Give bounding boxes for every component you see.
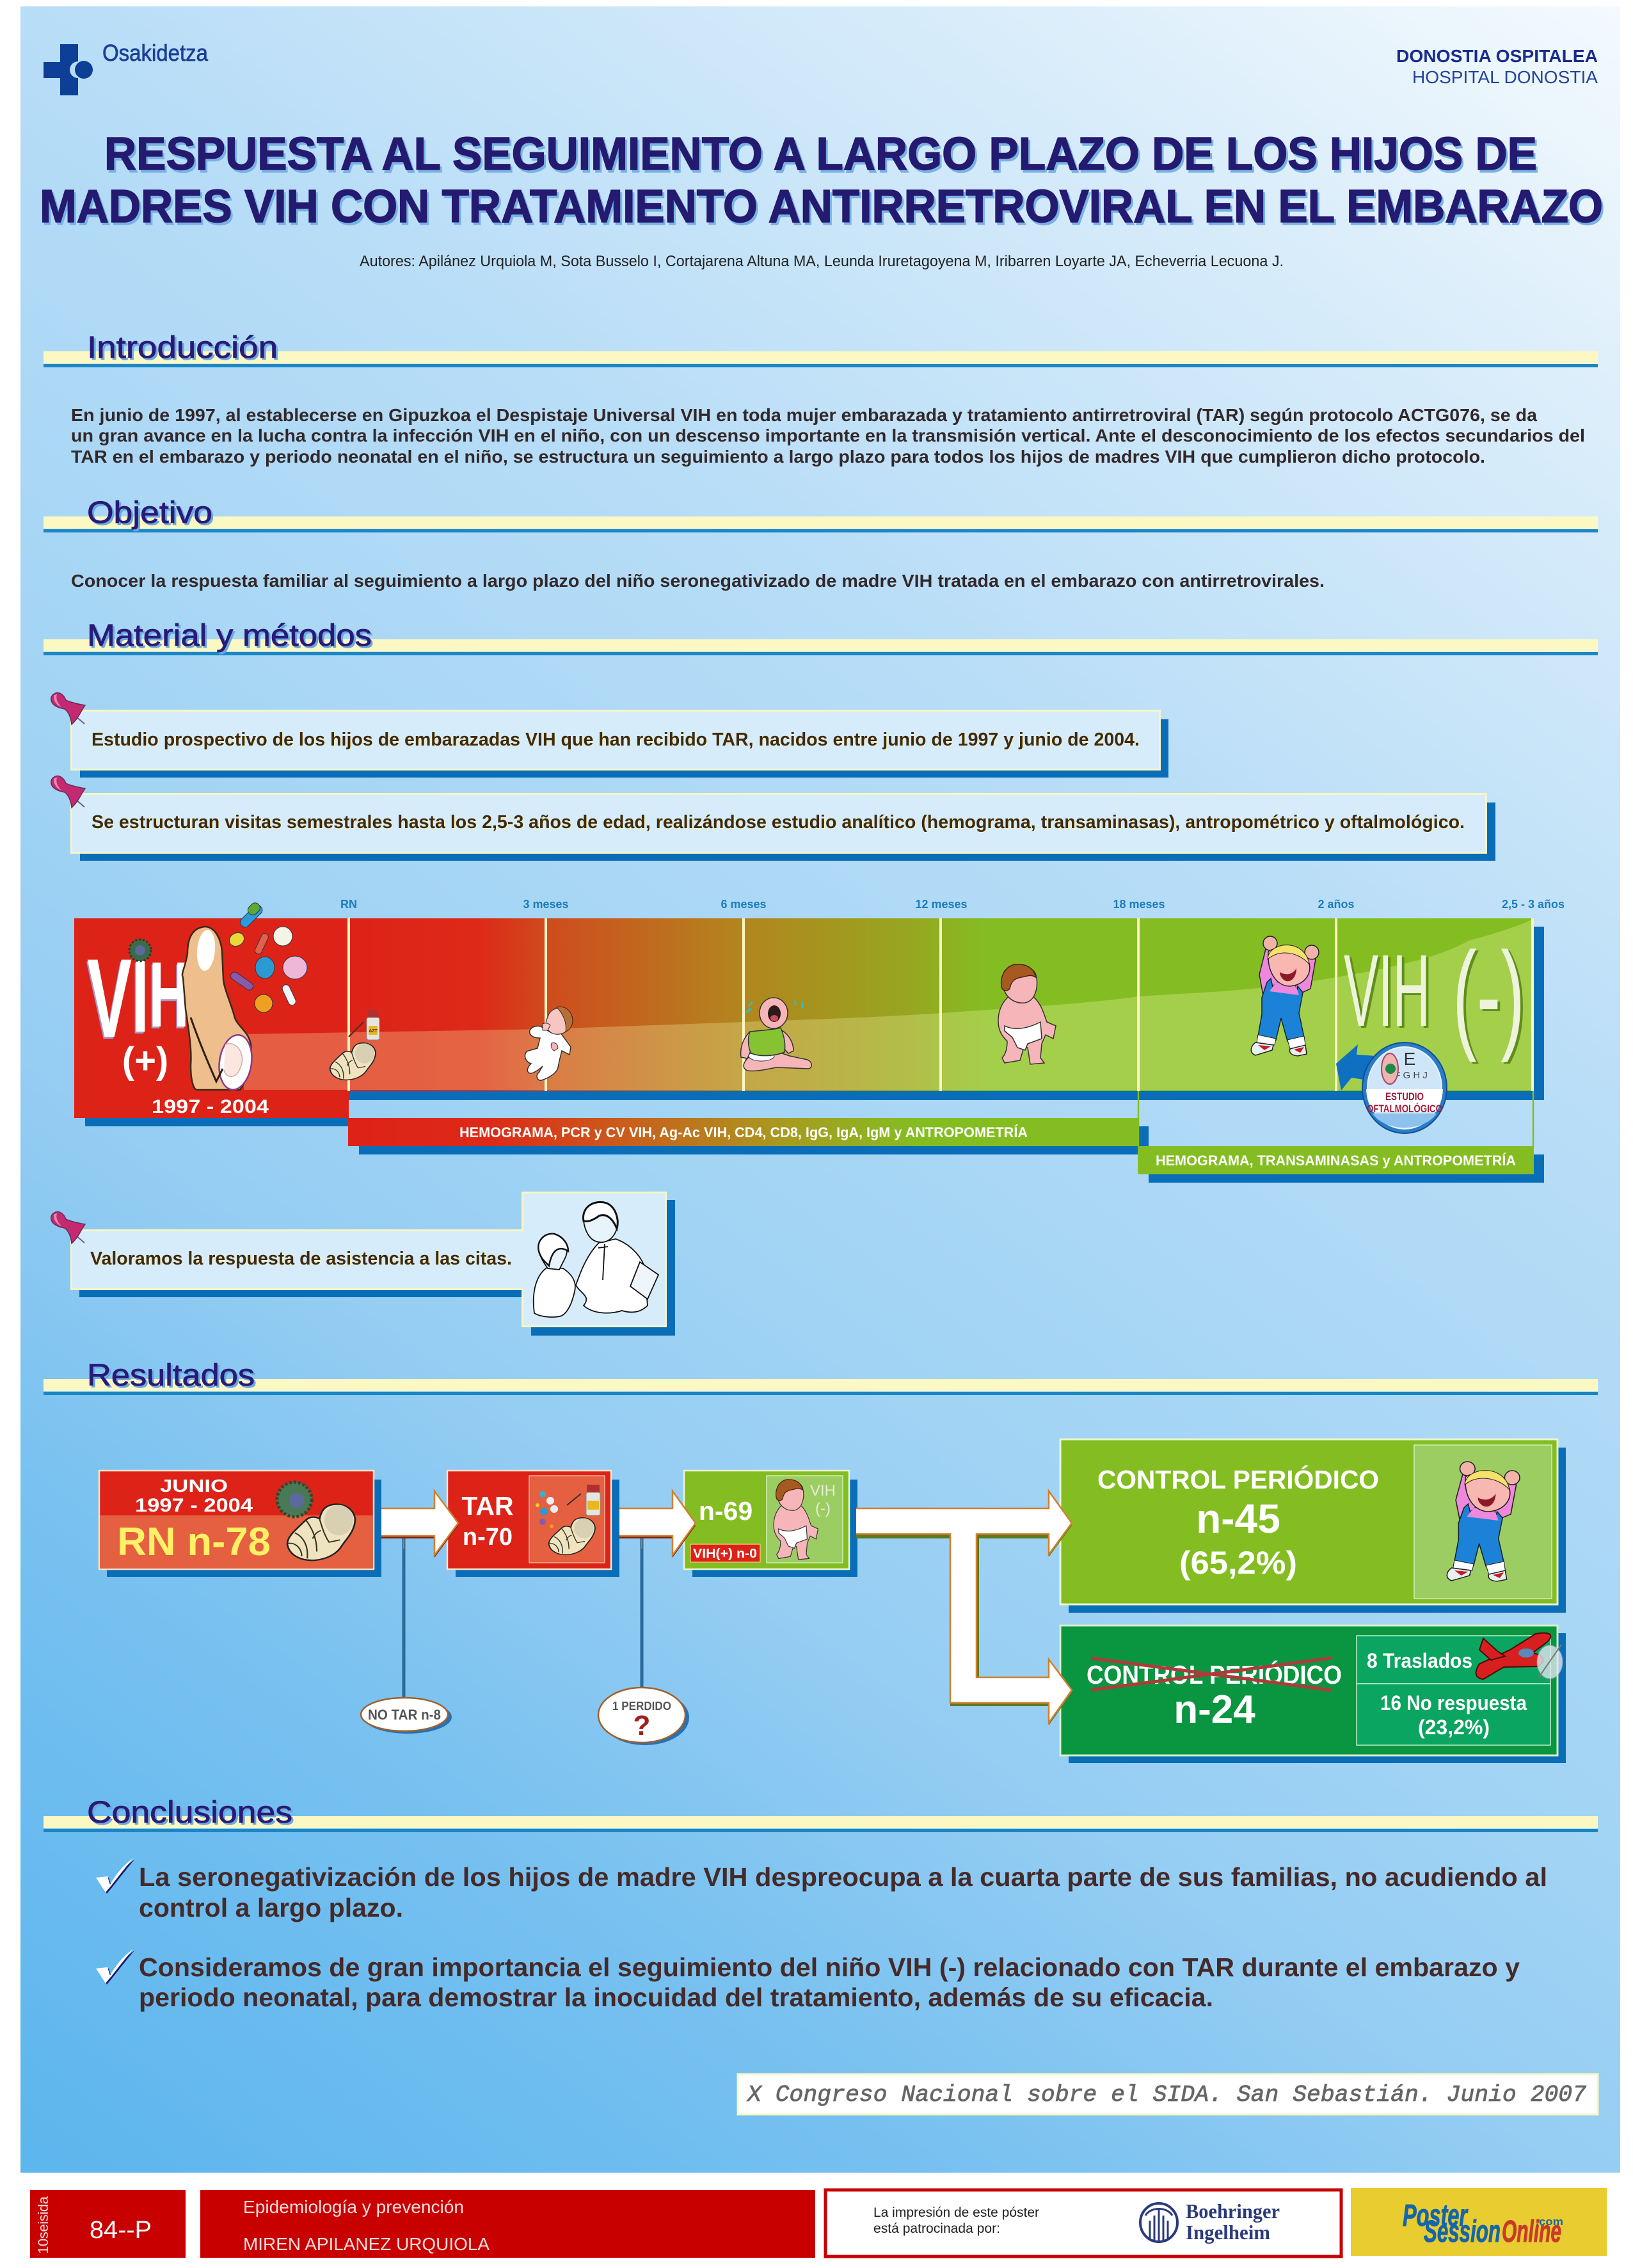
box: RN n-78: RN n-78 bbox=[117, 1520, 271, 1564]
bubble: NO TAR: NO TAR n-8 bbox=[368, 1707, 441, 1723]
box: n-69: (-) bbox=[815, 1500, 831, 1517]
VIH positive red block bbox=[74, 918, 349, 1118]
icon: medicine bottle bbox=[349, 1010, 379, 1040]
VIH label: V bbox=[87, 935, 132, 1061]
bubble: NO TAR bbox=[361, 1698, 452, 1734]
conclusion 2 bbox=[96, 1949, 1520, 2012]
box: TAR n-70: n-70 bbox=[463, 1524, 513, 1551]
footer: sponsor: La impresión de este póster bbox=[873, 2205, 1039, 2220]
ophthalmology badge bbox=[1336, 1042, 1447, 1133]
VIH negative label: VIH bbox=[1346, 935, 1433, 1050]
ophthalmology badge: ESTUDIO bbox=[1385, 1090, 1424, 1103]
section: Conclusiones bbox=[44, 1796, 1598, 1832]
timeline month labels: 2,5 - 3 años bbox=[1502, 898, 1565, 911]
footer: poster number: 84--P bbox=[90, 2217, 152, 2244]
VIH label bbox=[87, 935, 189, 1061]
VIH negative label: VIH bbox=[1344, 933, 1430, 1048]
box: control periódico n-24: CONTROL PERIÓDICO bbox=[1087, 1660, 1342, 1689]
timeline month labels: 2 años bbox=[1318, 898, 1355, 911]
box: control periódico n-45: n-45 bbox=[1196, 1496, 1280, 1542]
box: RN n-78: JUNIO bbox=[160, 1476, 228, 1496]
lab test band red to green bbox=[348, 1118, 1138, 1146]
conclusion 2: periodo neonatal, para demostrar la inocuidad del tratamiento, además de su eficacia. bbox=[139, 1983, 1213, 2012]
icon: pills bbox=[227, 901, 307, 1012]
T-shaped arrow bbox=[856, 1491, 1072, 1725]
years: 1997 - 2004 bbox=[152, 1096, 269, 1117]
box: RN n-78 bbox=[99, 1471, 381, 1577]
footer: category and author: Epidemiología y prevención bbox=[243, 2197, 464, 2217]
box: n-69: n-69 bbox=[699, 1496, 753, 1526]
callout: estudio prospectivo: Estudio prospectivo de los hijos de embarazadas VIH que han recibido TAR, nacidos entre junio de 1997 y junio de 2004. bbox=[92, 730, 1140, 750]
icon: baby 3 months bbox=[525, 1007, 573, 1080]
icon: crying baby 6 months bbox=[741, 998, 811, 1071]
plus sign: (+) bbox=[122, 1040, 168, 1082]
box: TAR n-70 bbox=[447, 1471, 619, 1577]
icon: medicine bottle: AZT bbox=[369, 1029, 378, 1034]
introduction text: TAR en el embarazo y periodo neonatal en el niño, se estructura un seguimiento a largo plazo para todos los hijos de madres VIH que cumplieron dicho protocolo. bbox=[71, 447, 1485, 467]
icon: happy toddler bbox=[1251, 936, 1319, 1056]
callout: valoramos asistencia bbox=[72, 1193, 675, 1336]
authors: Autores: Apilánez Urquiola M, Sota Busselo I, Cortajarena Altuna MA, Leunda Iruretagoyena M, Iribarren Loyarte JA, Echeverria Lecuona J. bbox=[360, 253, 1284, 270]
box: control periódico n-24 bbox=[1060, 1625, 1566, 1763]
section: Objetivo: Objetivo bbox=[87, 496, 212, 530]
lab test band green: HEMOGRAMA, TRANSAMINASAS y ANTROPOMETRÍA bbox=[1156, 1153, 1516, 1169]
title: RESPUESTA AL SEGUIMIENTO A LARGO PLAZO DE LOS HIJOS DE bbox=[104, 129, 1537, 180]
callout: valoramos asistencia: Valoramos la respuesta de asistencia a las citas. bbox=[90, 1249, 512, 1269]
timeline month labels: 6 meses bbox=[721, 898, 767, 911]
gradient progress bar bbox=[349, 918, 1534, 1091]
footer: poster number: 10seisida bbox=[35, 2196, 51, 2254]
results flow diagram bbox=[99, 1439, 1566, 1763]
introduction text: En junio de 1997, al establecerse en Gipuzkoa el Despistaje Universal VIH en toda mujer embarazada y tratamiento antirretroviral (TAR) según protocolo ACTG076, se da bbox=[71, 405, 1538, 425]
box: RN n-78: 1997 - 2004 bbox=[135, 1495, 253, 1516]
box: control periódico n-24: (23,2%) bbox=[1418, 1716, 1490, 1739]
ophthalmology badge: F G H J bbox=[1394, 1070, 1428, 1081]
logo: Boehringer Ingelheim: Ingelheim bbox=[1186, 2221, 1270, 2244]
conclusion 1 bbox=[96, 1858, 1547, 1922]
box: control periódico n-24: n-24 bbox=[1174, 1688, 1255, 1732]
icon: pushpin 2 bbox=[51, 776, 85, 808]
introduction text: un gran avance en la lucha contra la infección VIH en el niño, con un descenso importante en la transmisión vertical. Ante el desconocimiento de los efectos secundarios del bbox=[71, 426, 1585, 445]
icon: pushpin 3 bbox=[51, 1211, 85, 1243]
box: control periódico n-45: (65,2%) bbox=[1179, 1545, 1297, 1581]
lab test band green bbox=[1138, 1091, 1534, 1174]
arrow 2 bbox=[619, 1491, 696, 1558]
box: TAR n-70: TAR bbox=[461, 1491, 514, 1521]
objective text: Conocer la respuesta familiar al seguimiento a largo plazo del niño seronegativizado de madre VIH tratada en el embarazo con antirretrovirales. bbox=[71, 571, 1325, 591]
section: Introducción: Introducción bbox=[87, 331, 278, 365]
arrow 1 bbox=[381, 1491, 458, 1558]
conclusion 1: La seronegativización de los hijos de madre VIH despreocupa a la cuarta parte de sus familias, no acudiendo al bbox=[139, 1862, 1547, 1892]
timeline month labels: 3 meses bbox=[523, 898, 569, 911]
footer: poster session online logo bbox=[1351, 2188, 1607, 2256]
connector lines bbox=[404, 1536, 642, 1699]
VIH label: I bbox=[132, 939, 149, 1053]
title: MADRES VIH CON TRATAMIENTO ANTIRRETROVIRAL EN EL EMBARAZO bbox=[40, 181, 1603, 232]
congress banner bbox=[738, 2074, 1598, 2114]
rising light band bbox=[244, 918, 1534, 1090]
timeline blue shadows bbox=[85, 927, 1544, 1183]
VIH negative label: (-) bbox=[1455, 929, 1527, 1065]
section: Material y métodos bbox=[44, 619, 1598, 655]
section: Resultados bbox=[44, 1359, 1598, 1395]
conclusion 2: Consideramos de gran importancia el seguimiento del niño VIH (-) relacionado con TAR durante el embarazo y bbox=[139, 1953, 1520, 1982]
section: Objetivo bbox=[44, 496, 1598, 532]
introduction text bbox=[71, 405, 1585, 467]
section: Introducción bbox=[44, 331, 1598, 367]
timeline chart bbox=[74, 898, 1565, 1183]
footer: sponsor bbox=[825, 2190, 1341, 2256]
footer: poster number bbox=[30, 2190, 186, 2258]
timeline vertical markers bbox=[349, 918, 1533, 1091]
icon: baby 12 months bbox=[998, 964, 1056, 1064]
icon: pregnant woman bbox=[182, 927, 255, 1092]
callout: visitas semestrales: Se estructuran visitas semestrales hasta los 2,5-3 años de edad, realizándose estudio analítico (hemograma, transaminasas), antropométrico y oftalmológico. bbox=[92, 812, 1465, 833]
box: control periódico n-24: 16 No respuesta bbox=[1380, 1691, 1527, 1714]
bubble: 1 perdido: ? bbox=[633, 1710, 650, 1741]
title bbox=[40, 129, 1603, 232]
callout: visitas semestrales bbox=[72, 794, 1495, 861]
timeline month labels: RN bbox=[340, 898, 357, 911]
box: control periódico n-45 bbox=[1060, 1439, 1566, 1613]
footer: poster session online logo: Online bbox=[1502, 2215, 1561, 2249]
timeline month labels bbox=[340, 898, 1565, 911]
box: n-69 bbox=[684, 1471, 857, 1577]
bubble: 1 perdido bbox=[598, 1688, 689, 1745]
icon: pushpin 1 bbox=[51, 692, 85, 724]
section: Material y métodos: Material y métodos bbox=[87, 619, 372, 653]
box: control periódico n-45: CONTROL PERIÓDICO bbox=[1097, 1465, 1379, 1494]
VIH label: H bbox=[149, 943, 189, 1047]
box: n-69: VIH(+) n-0 bbox=[693, 1547, 757, 1561]
timeline month labels: 12 meses bbox=[915, 898, 968, 911]
congress banner: X Congreso Nacional sobre el SIDA. San Sebastián. Junio 2007 bbox=[746, 2082, 1586, 2108]
footer: poster session online logo: .com bbox=[1536, 2216, 1563, 2228]
timeline month labels: 18 meses bbox=[1113, 898, 1165, 911]
footer: poster session online logo: Poster bbox=[1403, 2199, 1469, 2233]
icon: fetal newborn bbox=[330, 1043, 376, 1080]
ophthalmology badge: E bbox=[1404, 1049, 1415, 1069]
logo: Osakidetza bbox=[44, 40, 209, 95]
footer: sponsor: está patrocinada por: bbox=[873, 2221, 1000, 2236]
ophthalmology badge: OFTALMOLÓGICO bbox=[1367, 1103, 1442, 1115]
footer: category and author: MIREN APILANEZ URQUIOLA bbox=[243, 2234, 490, 2254]
footer: category and author bbox=[200, 2190, 815, 2258]
section: Conclusiones: Conclusiones bbox=[87, 1796, 292, 1830]
hospital name bbox=[1396, 46, 1598, 87]
icon: pills and newborn bbox=[536, 1485, 600, 1554]
footer: poster session online logo: Session bbox=[1424, 2215, 1501, 2249]
lab test band red to green: HEMOGRAMA, PCR y CV VIH, Ag-Ac VIH, CD4, CD8, IgG, IgA, IgM y ANTROPOMETRÍA bbox=[459, 1124, 1028, 1140]
icon: virus bbox=[129, 939, 151, 961]
bubble: 1 perdido: 1 PERDIDO bbox=[612, 1700, 671, 1713]
section: Resultados: Resultados bbox=[87, 1359, 255, 1393]
icon: airplane bbox=[1476, 1633, 1563, 1679]
callout: estudio prospectivo bbox=[72, 710, 1168, 778]
logo: Boehringer Ingelheim: Boehringer bbox=[1186, 2200, 1280, 2223]
conclusion 1: control a largo plazo. bbox=[139, 1893, 403, 1922]
icon: doctor and child bbox=[534, 1202, 658, 1317]
logo: Boehringer Ingelheim bbox=[1140, 2200, 1280, 2244]
hospital name: HOSPITAL DONOSTIA bbox=[1412, 67, 1598, 87]
hospital name: DONOSTIA OSPITALEA bbox=[1396, 46, 1598, 66]
box: n-69: VIH bbox=[810, 1482, 836, 1499]
VIH negative label: (-) bbox=[1453, 927, 1525, 1063]
box: control periódico n-24: 8 Traslados bbox=[1367, 1649, 1472, 1672]
logo: Osakidetza: Osakidetza bbox=[102, 40, 209, 66]
